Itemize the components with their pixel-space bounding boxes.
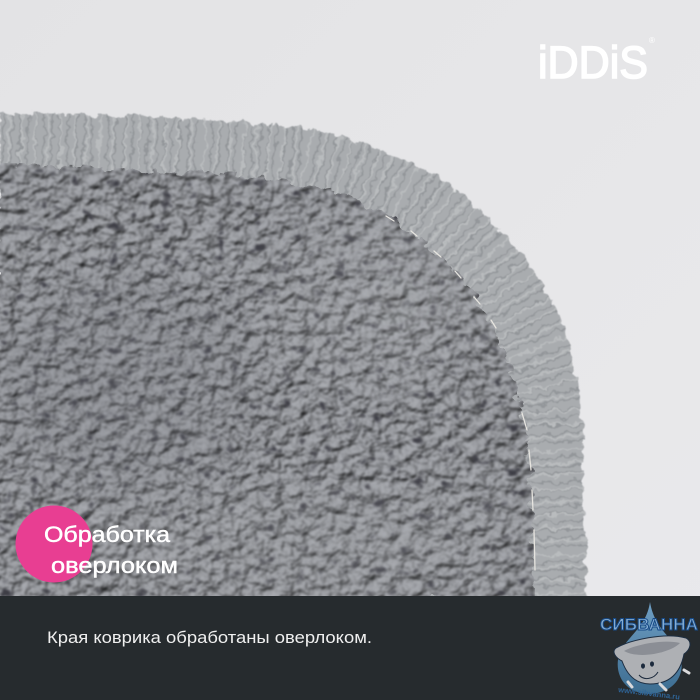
bottom bar (0, 596, 700, 700)
badge label: Обработка (44, 522, 171, 547)
rug pile (0, 163, 535, 600)
tub feet (628, 670, 689, 690)
logo: iDDiS: ® (649, 36, 655, 45)
brand name: СИБВАННА (600, 615, 698, 634)
rug overlocked border (0, 100, 600, 600)
bathtub (614, 636, 690, 684)
caption: Края коврика обработаны оверлоком. (47, 628, 372, 647)
tub face (639, 661, 658, 679)
logo: Sibvanna (600, 602, 698, 700)
badge: overlock (16, 506, 178, 582)
water drop (618, 602, 682, 694)
pink circle (16, 506, 92, 582)
white stitching (386, 216, 535, 570)
rug (0, 100, 600, 600)
logo: iDDiS: iDDiS (538, 37, 648, 88)
badge label: оверлоком (51, 553, 178, 578)
